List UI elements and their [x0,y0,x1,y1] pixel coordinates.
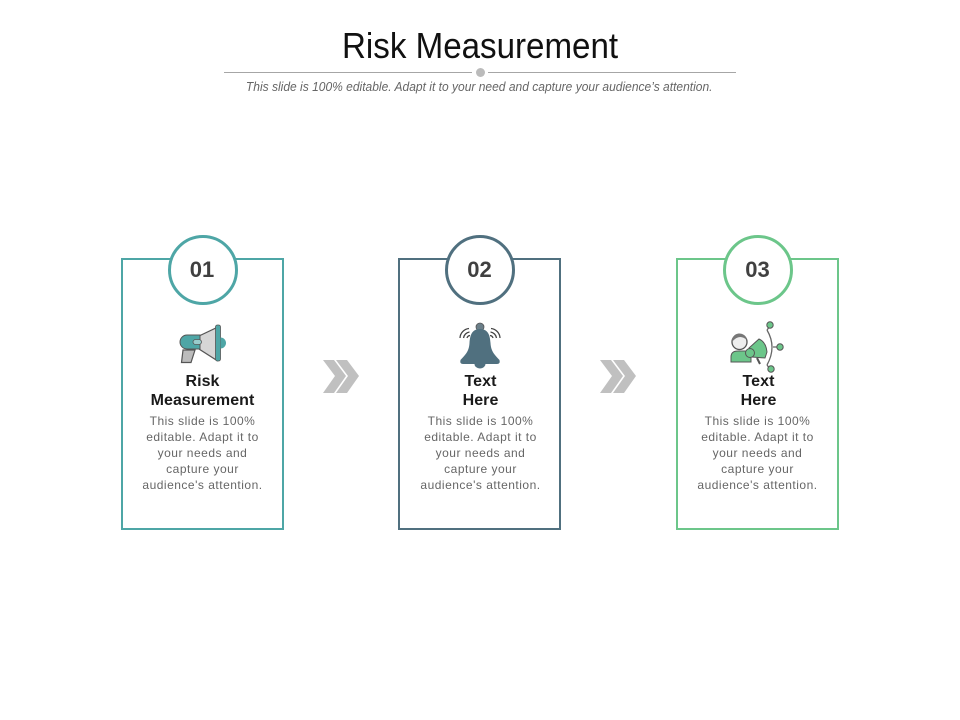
card 2 text: capture your [444,462,517,476]
card 1 heading: Risk [186,373,220,390]
card 3 text: your needs and [713,446,802,460]
card 2 heading [463,373,498,409]
arrow: chevrons 2 [600,360,636,393]
card 2 number: 02 [467,257,492,282]
arrow: chevrons 1 [323,360,359,393]
card 3 number [723,235,793,305]
card 3 heading: Text [743,373,774,390]
title: Risk Measurement [342,25,618,66]
card 2 heading: Text [465,373,496,390]
card 2 text: This slide is 100% [428,414,533,428]
card 2 text: audience's attention. [420,478,541,492]
card 2 frame [398,258,561,530]
panel: card 2 [398,235,561,530]
panel: card 3 [676,235,839,530]
card 2 number [445,235,515,305]
card 3 frame [676,258,839,530]
card 1 text: capture your [166,462,239,476]
card 2 heading: Here [463,392,498,409]
card 3 text: capture your [721,462,794,476]
card 1 text: editable. Adapt it to [146,430,259,444]
card 1 text: your needs and [158,446,247,460]
card 3 heading: Here [741,392,776,409]
card 1 text: audience's attention. [142,478,263,492]
card 1 heading: Measurement [151,392,254,409]
card 3 text [697,414,818,492]
card 3 text: This slide is 100% [705,414,810,428]
card 3 text: audience's attention. [697,478,818,492]
card 3 text: editable. Adapt it to [701,430,814,444]
card 3 number: 03 [745,257,770,282]
icon: person with megaphone and network [730,321,784,373]
card 1 number [168,235,238,305]
card 2 text [420,414,541,492]
icon: megaphone [180,324,226,364]
panel: card 1 [121,235,284,530]
card 3 heading [741,373,776,409]
card 1 heading [151,373,254,409]
card 1 text [142,414,263,492]
card 1 number: 01 [190,257,214,282]
subtitle: This slide is 100% editable. Adapt it to your need and capture your audience’s attention. [246,79,712,94]
card 2 text: editable. Adapt it to [424,430,537,444]
icon: bell [459,322,501,368]
card 1 frame [121,258,284,530]
card 2 text: your needs and [436,446,525,460]
title divider [224,68,736,77]
card 1 text: This slide is 100% [150,414,255,428]
